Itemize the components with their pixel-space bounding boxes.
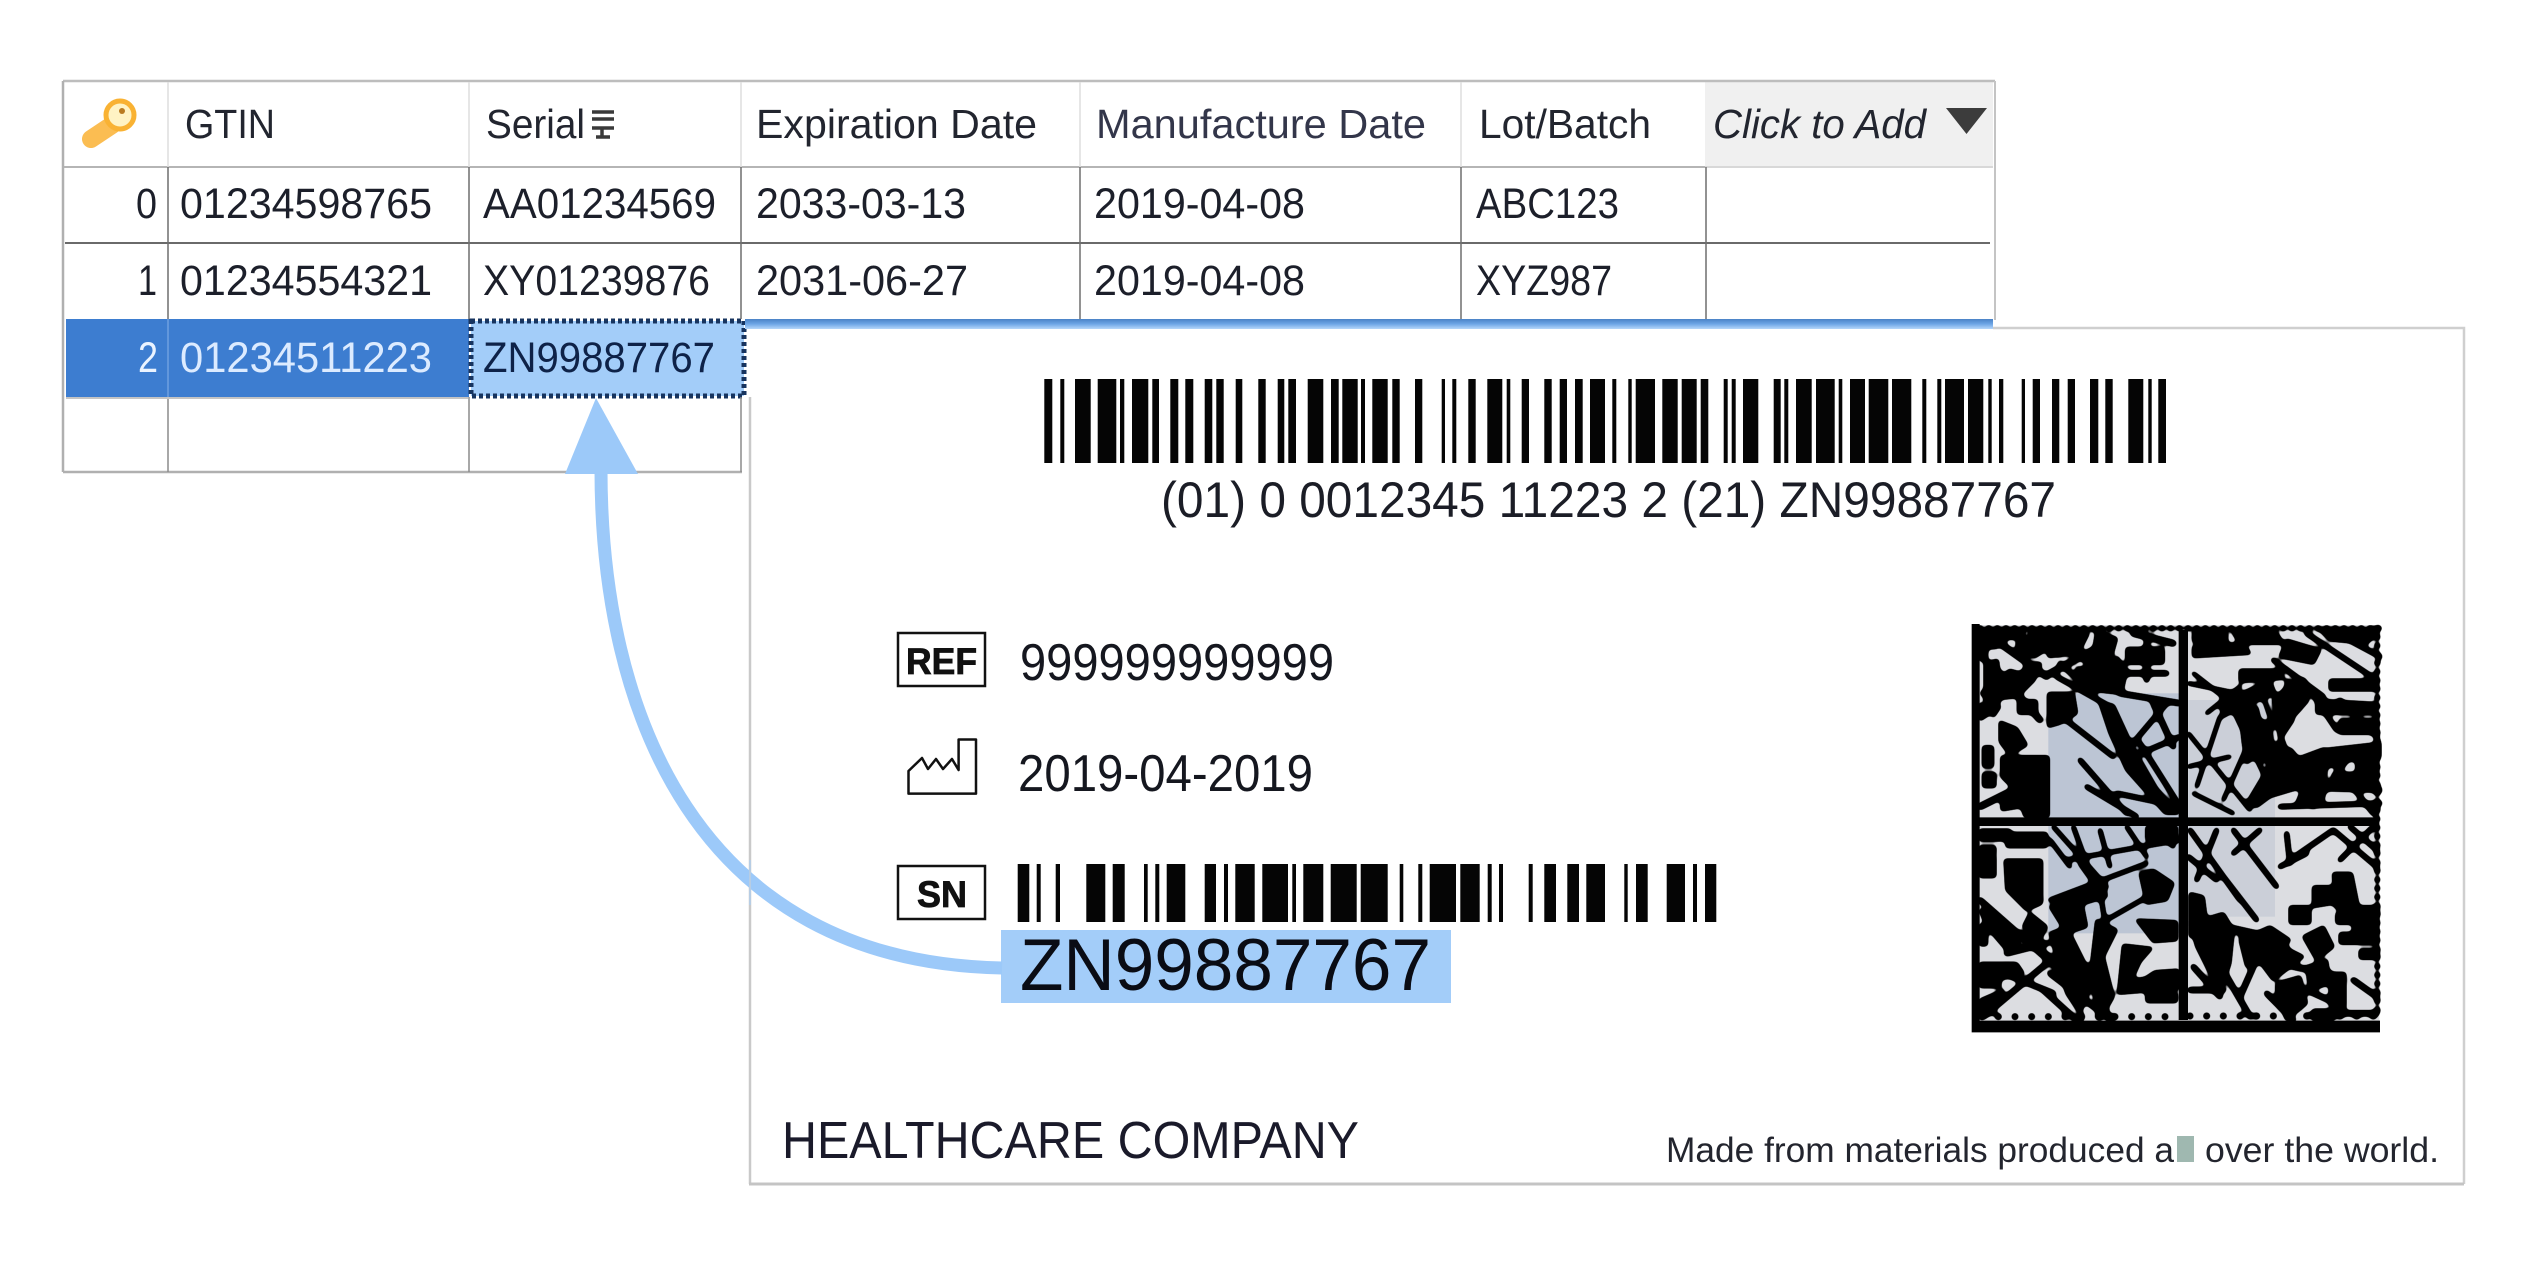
row 2 selected (138, 334, 715, 382)
selected row highlight (66, 319, 469, 397)
row 2 selected: 01234511223 (180, 334, 432, 382)
row 0: 0 (136, 180, 157, 228)
icon: primary key (91, 101, 134, 139)
row 0: ABC123 (1476, 180, 1619, 228)
row 0: AA01234569 (483, 180, 716, 228)
row 0: 2019-04-08 (1094, 180, 1305, 228)
selected serial cell (471, 321, 744, 396)
icon: dropdown triangle (1946, 108, 1987, 134)
fine print: Made from materials produced a (1666, 1131, 2175, 1170)
icon: REF symbol: REF (906, 641, 977, 682)
icon: REF symbol (898, 633, 985, 686)
row 0 (136, 180, 1619, 228)
row 1 (138, 257, 1612, 305)
fine print: over the world. (2205, 1131, 2439, 1170)
serial number highlight: ZN99887767 (1020, 925, 1431, 1006)
serial barcode (1018, 864, 1716, 922)
row 0: 01234598765 (180, 180, 432, 228)
row 1: XYZ987 (1476, 257, 1612, 305)
row 1: 2019-04-08 (1094, 257, 1305, 305)
panel: database table (63, 81, 1995, 472)
panel: product label (745, 319, 2464, 1184)
row 1: 01234554321 (180, 257, 432, 305)
blue selection edge (745, 319, 1993, 329)
table headers: Lot/Batch (1479, 101, 1651, 147)
icon: SN symbol: SN (917, 874, 967, 915)
icon: sort indicator (592, 112, 614, 138)
row 0: 2033-03-13 (756, 180, 966, 228)
icon: manufacture date factory (908, 740, 976, 794)
icon: SN symbol (898, 866, 985, 919)
row 2 selected: 2 (138, 334, 158, 382)
main barcode (1044, 379, 2166, 463)
table headers: Expiration Date (756, 101, 1037, 147)
arrow: from label serial number to table cell (565, 398, 1002, 968)
table headers: Serial (486, 101, 585, 147)
table headers (185, 101, 1927, 147)
2D data matrix code (1972, 624, 2380, 1032)
row 1: 1 (138, 257, 157, 305)
table headers: GTIN (185, 101, 275, 147)
reference number: 999999999999 (1020, 634, 1334, 692)
row 1: XY01239876 (483, 257, 710, 305)
row 2 selected: ZN99887767 (483, 334, 715, 382)
row 1: 2031-06-27 (756, 257, 968, 305)
manufacture date: 2019-04-2019 (1018, 745, 1313, 803)
table headers: Manufacture Date (1096, 101, 1426, 147)
company name: HEALTHCARE COMPANY (782, 1112, 1359, 1170)
table headers: Click to Add (1713, 101, 1927, 147)
fine print (1666, 1131, 2439, 1170)
label border over arrow (749, 860, 751, 905)
barcode human-readable text: (01) 0 0012345 11223 2 (21) ZN99887767 (1161, 472, 2056, 528)
